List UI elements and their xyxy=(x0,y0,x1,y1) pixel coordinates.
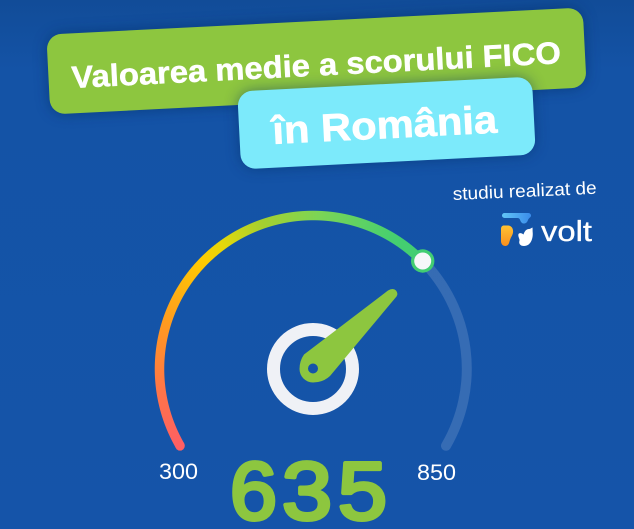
title banner: green: Valoarea medie a scorului FICO xyxy=(71,35,562,95)
volt wordmark: volt xyxy=(541,216,592,248)
gauge remaining track xyxy=(423,261,467,446)
subtitle banner: cyan xyxy=(237,77,536,169)
icon: volt mark xyxy=(501,213,533,246)
gauge xyxy=(159,249,467,529)
title banner: green xyxy=(46,7,587,115)
gauge needle xyxy=(300,289,397,382)
label: maximum 850: 850 xyxy=(417,460,456,485)
gauge value marker xyxy=(411,249,434,273)
gauge arc start cap xyxy=(175,441,185,451)
subtitle banner: cyan: în România xyxy=(269,99,498,153)
score value xyxy=(230,446,387,529)
gauge arc gradient xyxy=(154,210,418,448)
volt logo xyxy=(501,213,592,248)
gauge hub ring xyxy=(274,330,352,408)
label: minimum 300: 300 xyxy=(159,459,198,484)
study credit text: studiu realizat de xyxy=(452,178,597,204)
